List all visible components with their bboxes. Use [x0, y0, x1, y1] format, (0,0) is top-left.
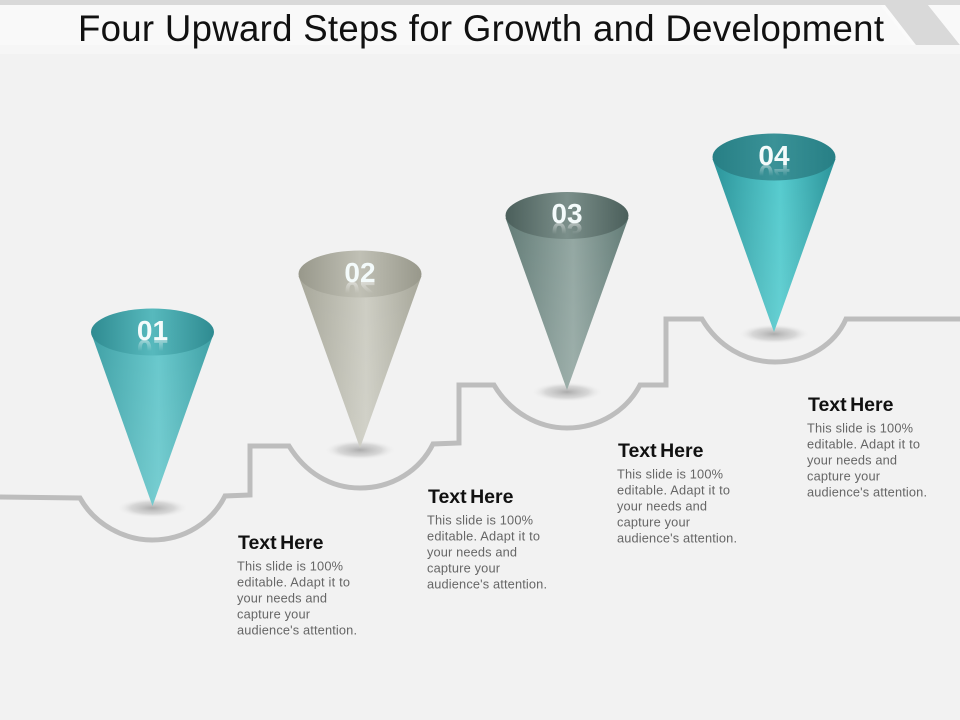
number 03: 03: [551, 217, 583, 248]
number 04: [758, 140, 790, 190]
body 01: audience's attention.: [237, 622, 357, 638]
body 04: audience's attention.: [807, 484, 927, 500]
number 02: 02: [344, 276, 376, 307]
body 01: editable. Adapt it to: [237, 574, 350, 590]
body 04: editable. Adapt it to: [807, 436, 920, 452]
body 01: [237, 558, 357, 638]
number 04: 04: [758, 140, 790, 171]
cone 04: [712, 134, 836, 344]
body 03: capture your: [617, 514, 691, 530]
text block 04: [807, 394, 927, 500]
body 02: This slide is 100%: [427, 512, 533, 528]
number 01: 01: [137, 334, 168, 365]
body 03: This slide is 100%: [617, 466, 723, 482]
body 03: editable. Adapt it to: [617, 482, 730, 498]
body 01: your needs and: [237, 590, 327, 606]
number 02: 02: [344, 257, 376, 288]
header banner: [0, 0, 960, 54]
number 03: 03: [551, 198, 583, 229]
body 02: audience's attention.: [427, 576, 547, 592]
cone 01: [91, 308, 214, 518]
text block 03: [617, 440, 737, 546]
number 01: 01: [137, 315, 168, 346]
text block 01: [237, 532, 357, 638]
text block 02: [427, 486, 547, 592]
cone 02: [298, 250, 422, 460]
body 03: [617, 466, 737, 546]
stepped curve line: [0, 319, 960, 540]
body 02: editable. Adapt it to: [427, 528, 540, 544]
body 02: your needs and: [427, 544, 517, 560]
number 02: [344, 257, 376, 307]
number 03: [551, 198, 583, 248]
body 02: [427, 512, 547, 592]
heading 02: Text Here: [428, 486, 514, 508]
number 01: [137, 315, 168, 365]
body 04: capture your: [807, 468, 881, 484]
body 02: capture your: [427, 560, 501, 576]
body 01: capture your: [237, 606, 311, 622]
number 04: 04: [758, 159, 790, 190]
body 04: your needs and: [807, 452, 897, 468]
body 03: your needs and: [617, 498, 707, 514]
body 03: audience's attention.: [617, 530, 737, 546]
heading 04: Text Here: [808, 394, 894, 416]
body 04: This slide is 100%: [807, 420, 913, 436]
cone 03: [506, 192, 628, 402]
heading 01: Text Here: [238, 532, 324, 554]
title: Four Upward Steps for Growth and Development: [78, 8, 884, 49]
body 04: [807, 420, 927, 500]
body 01: This slide is 100%: [237, 558, 343, 574]
heading 03: Text Here: [618, 440, 704, 462]
